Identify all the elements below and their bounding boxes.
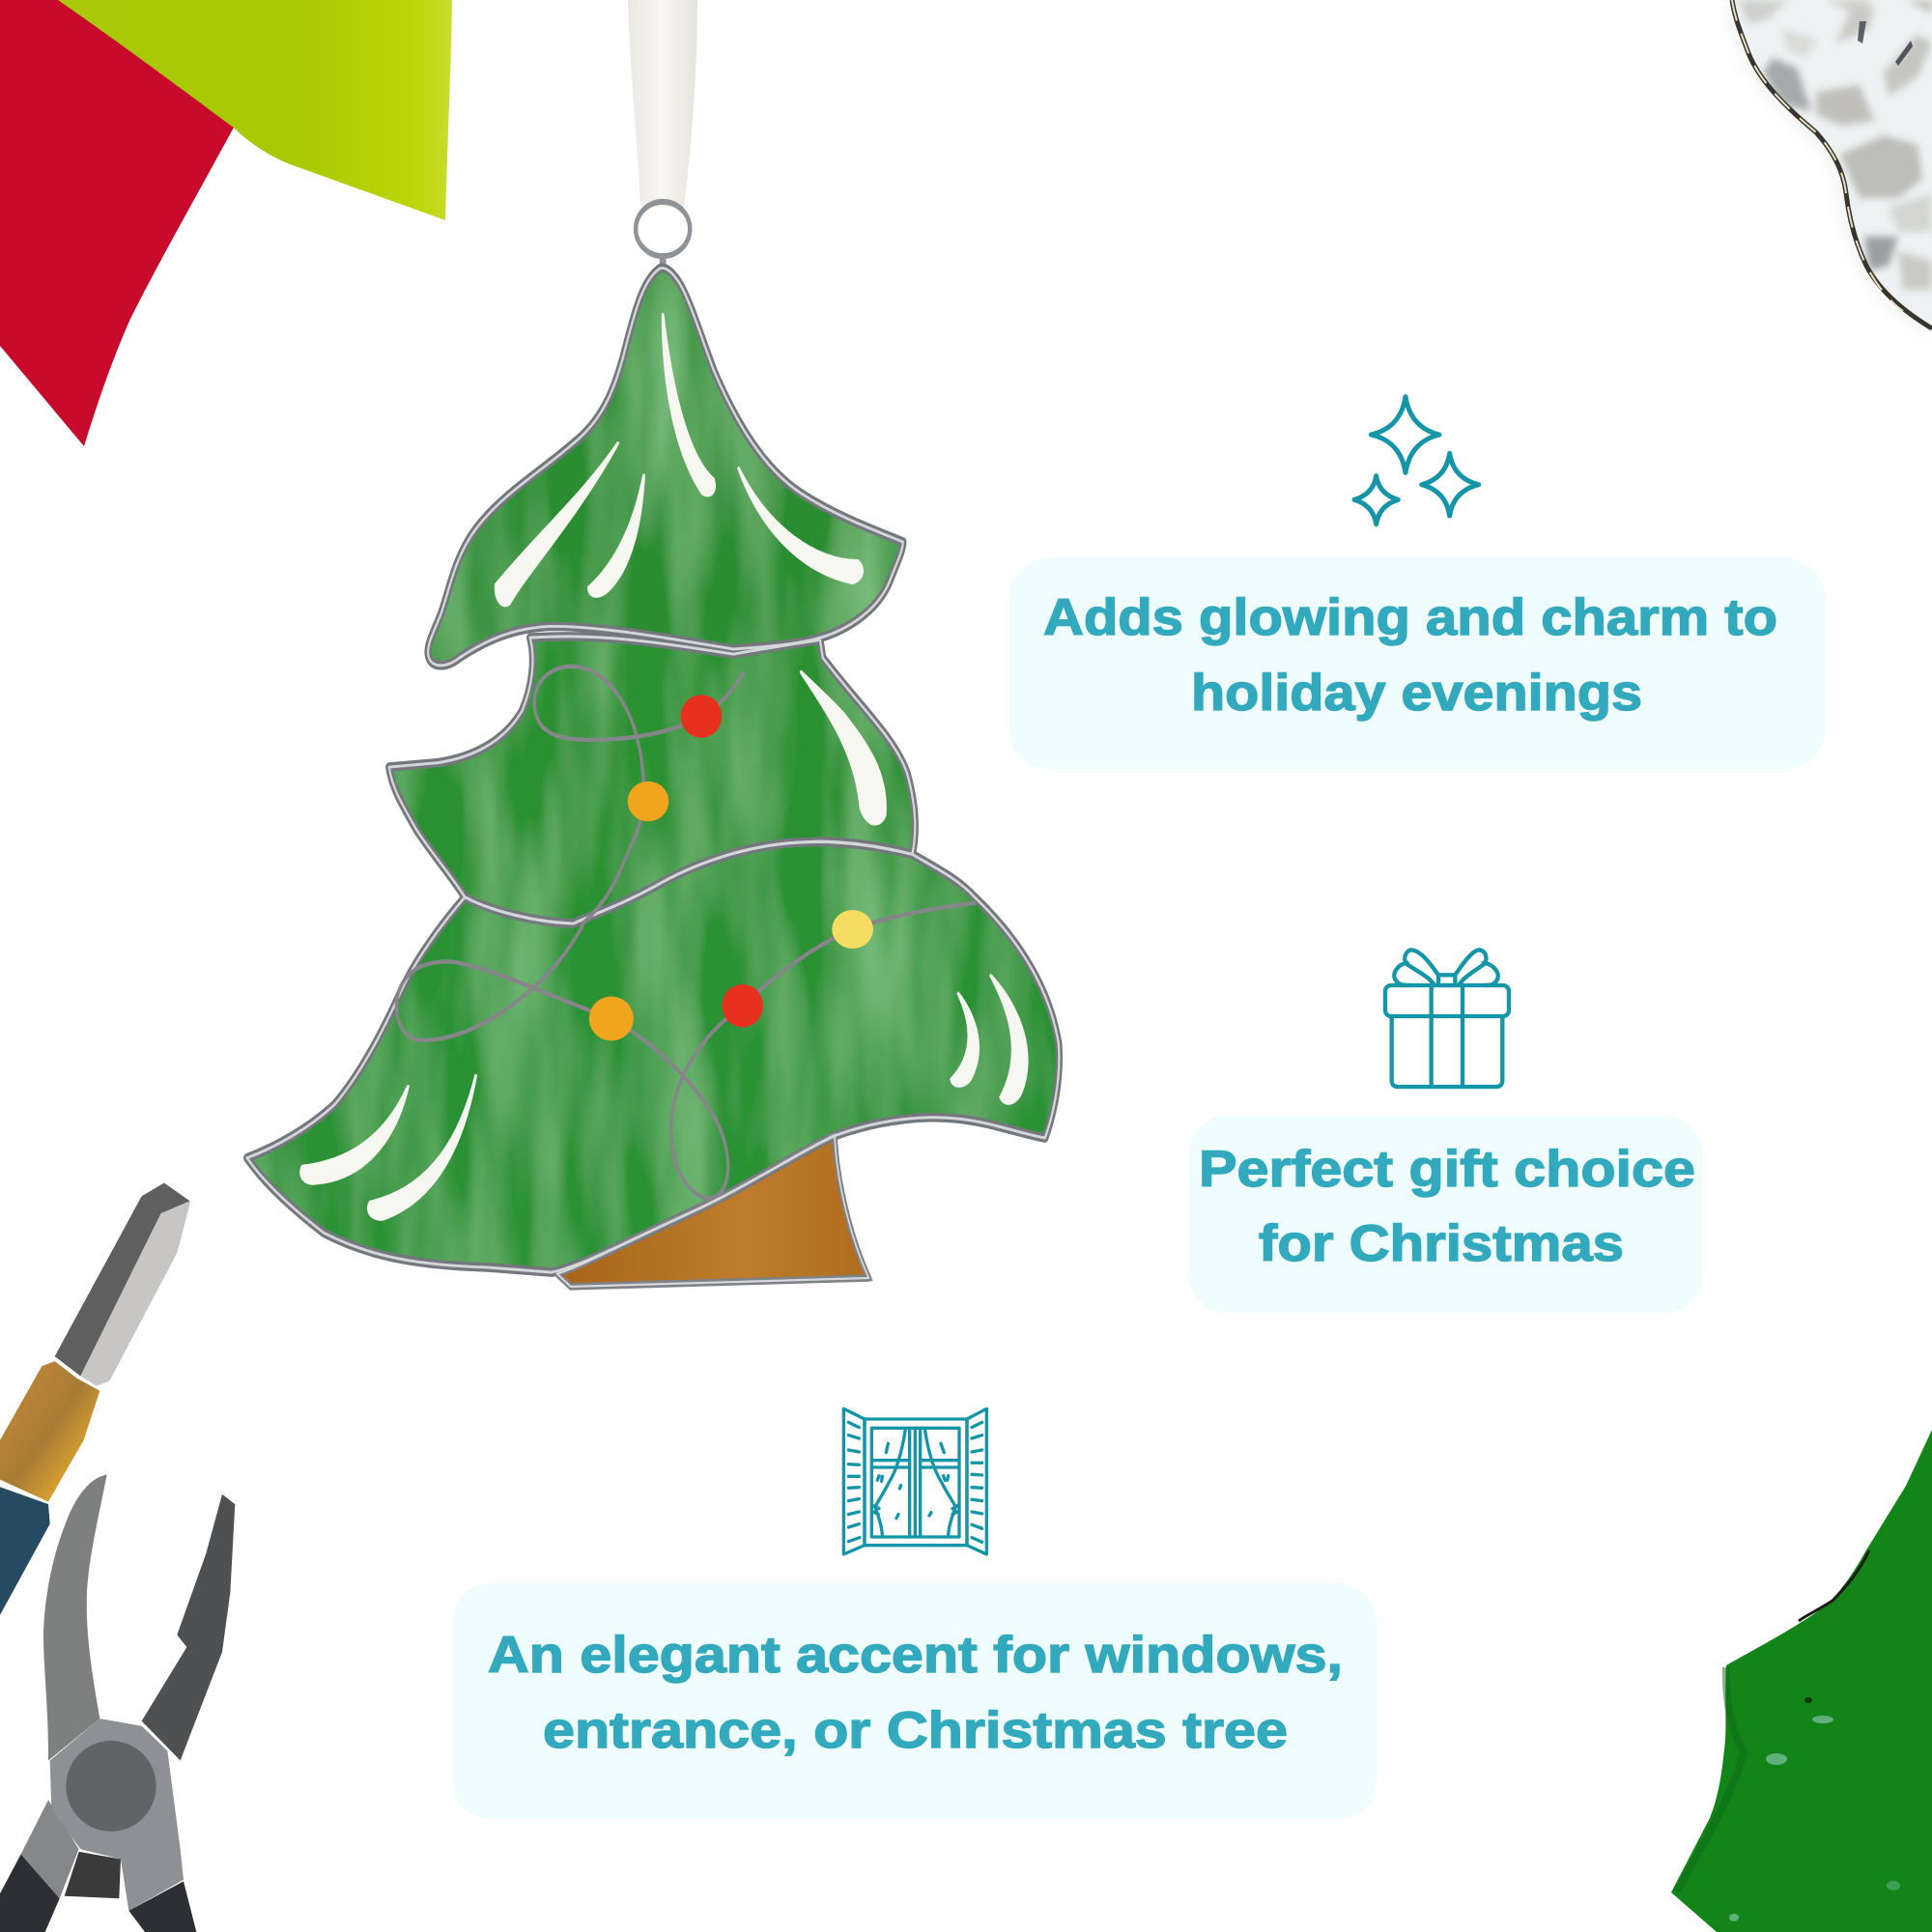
panel text: Adds glowing and charm to	[1043, 589, 1777, 646]
pliers body	[50, 1719, 184, 1911]
panel background	[1009, 558, 1825, 769]
pliers handle joint	[21, 1800, 79, 1898]
pliers right jaw	[142, 1494, 235, 1760]
panel text	[1043, 589, 1777, 722]
panel background	[452, 1583, 1377, 1819]
wire garland	[396, 667, 976, 1198]
panel text: for Christmas	[1259, 1215, 1624, 1272]
trunk	[557, 1135, 868, 1287]
white highlights	[301, 315, 1027, 1219]
panel text	[1199, 1141, 1695, 1272]
decoration: clear textured glass piece	[1732, 0, 1932, 328]
decoration: lime glass piece	[58, 0, 452, 220]
cutter handle	[0, 1487, 50, 1615]
pliers left handle	[0, 1854, 60, 1932]
pliers left jaw	[43, 1475, 107, 1760]
hanging ring	[636, 202, 690, 270]
solder lines	[247, 268, 1059, 1287]
icon: gift box	[1385, 950, 1509, 1087]
decoration: dark green glass piece	[1671, 1430, 1932, 1932]
panel text: entrance, or Christmas tree	[543, 1702, 1288, 1759]
panel: glowing and charm	[1009, 558, 1825, 769]
pliers pivot	[66, 1741, 156, 1832]
panel text: Perfect gift choice	[1199, 1141, 1695, 1198]
panel: elegant accent	[452, 1583, 1377, 1819]
beads	[589, 695, 873, 1040]
panel: gift choice	[1189, 1116, 1703, 1313]
pliers right handle	[128, 1881, 196, 1932]
cutter blade	[55, 1182, 190, 1376]
panel text: holiday evenings	[1191, 665, 1642, 722]
cutter blade edge	[80, 1201, 190, 1386]
cutter ferrule	[0, 1361, 99, 1502]
pliers spring	[65, 1852, 121, 1898]
icon: window with shutters and curtains	[843, 1408, 986, 1554]
icon: sparkles	[1354, 397, 1479, 525]
decoration: red glass piece	[0, 0, 235, 446]
product: stained glass Christmas tree ornament	[247, 202, 1059, 1287]
decoration: glass cutter and pliers	[0, 1182, 235, 1932]
panel text	[488, 1627, 1343, 1759]
panel background	[1189, 1116, 1703, 1313]
glass tiers	[247, 268, 1059, 1272]
ribbon	[628, 0, 697, 207]
panel text: An elegant accent for windows,	[488, 1627, 1343, 1684]
